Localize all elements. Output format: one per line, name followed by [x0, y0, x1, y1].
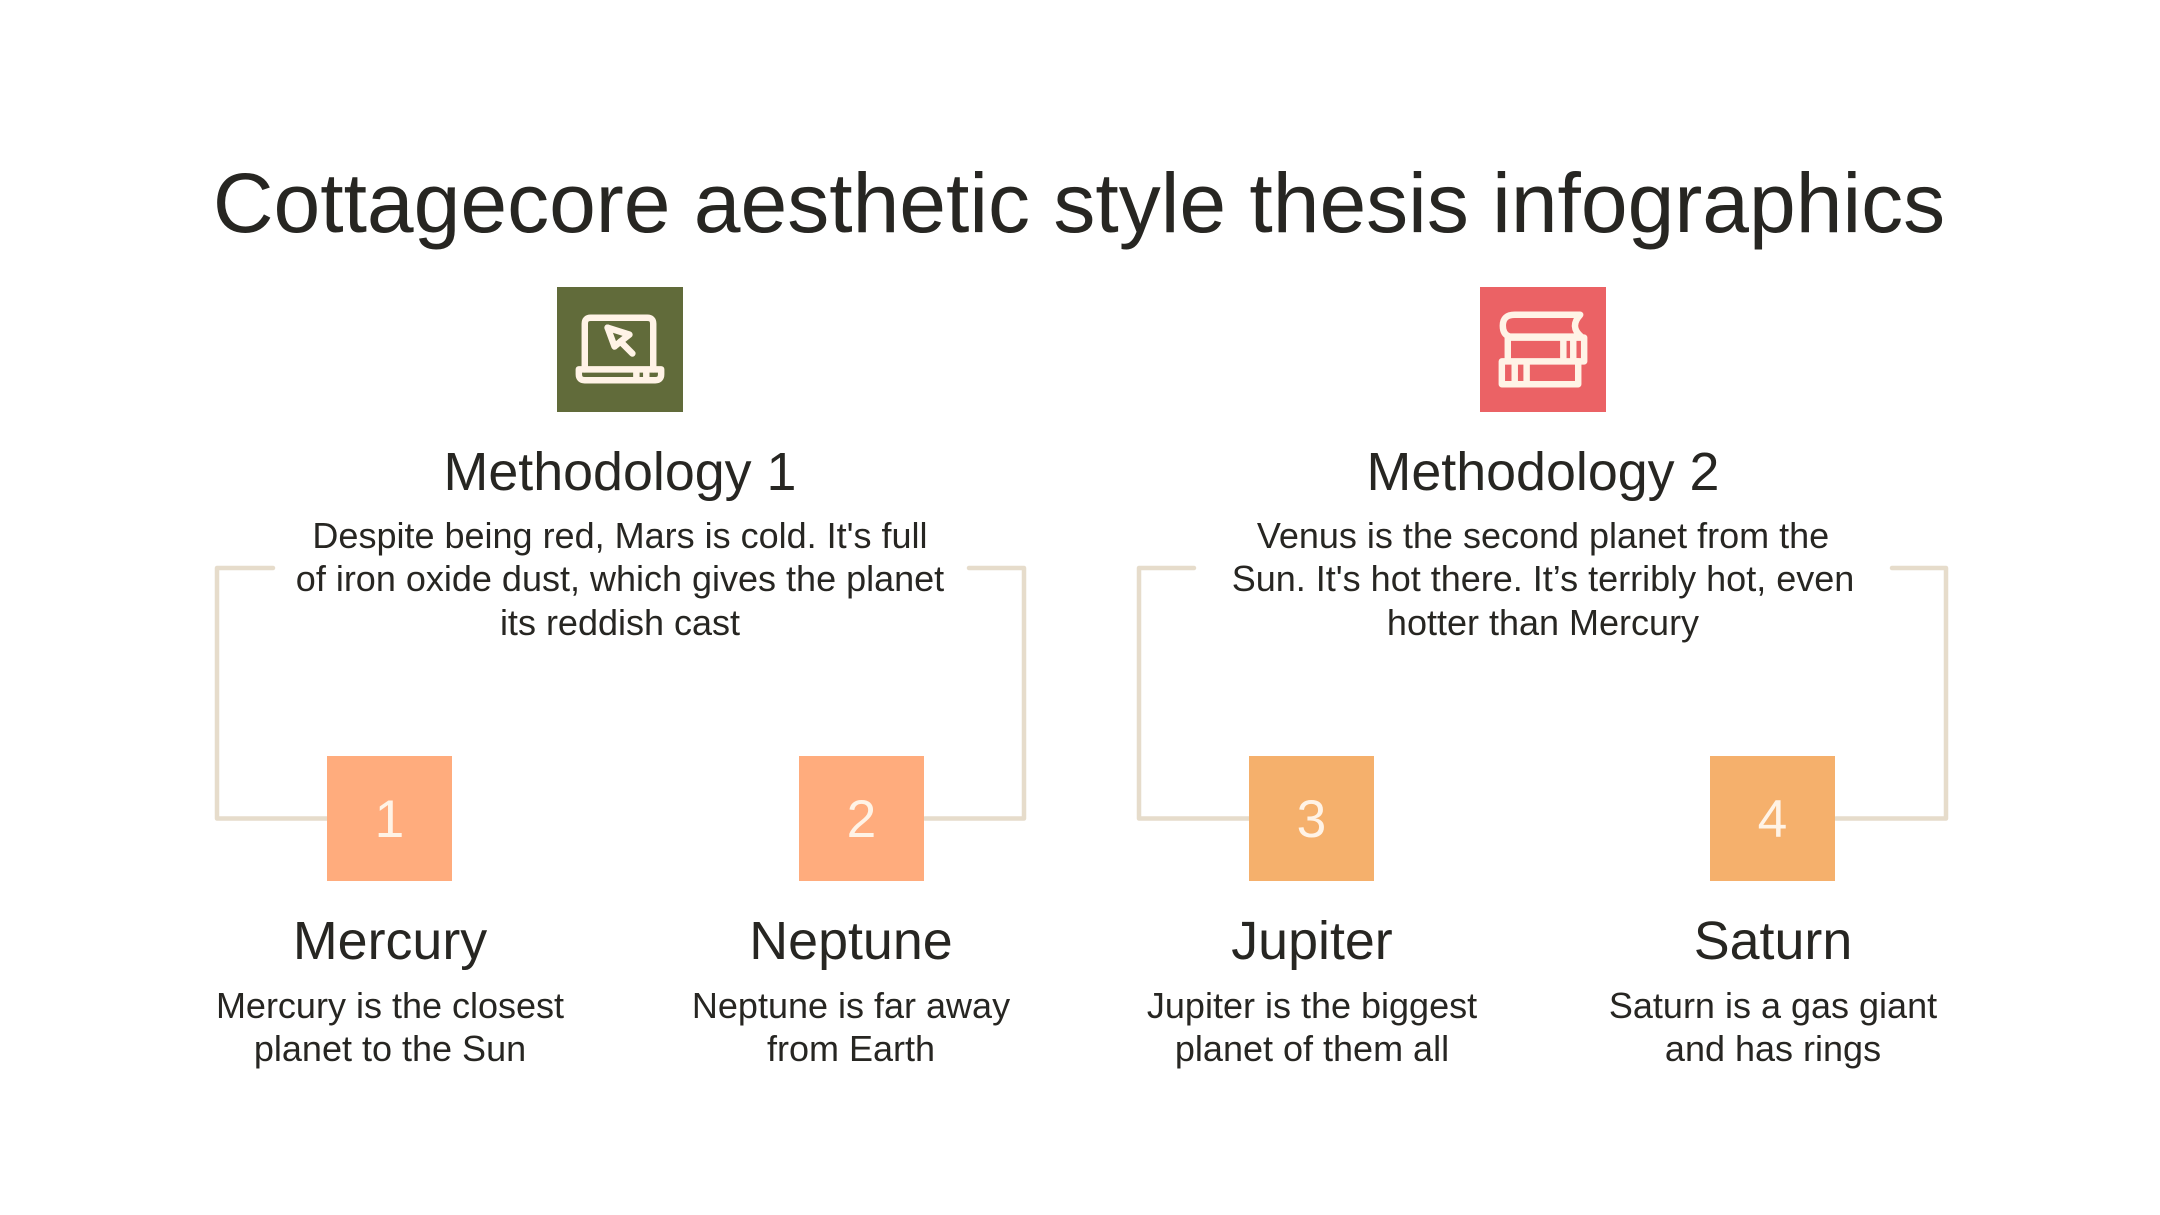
text: saturn description: and has rings [1665, 1028, 1881, 1069]
text: mercury description [216, 984, 564, 1069]
bracket: methodology 1 connector [214, 566, 1026, 821]
text: methodology 1 description: its reddish cast [500, 602, 740, 643]
bracket: methodology 2 connector [1136, 566, 1948, 821]
text: saturn description: Saturn is a gas giant [1609, 984, 1937, 1026]
number box 2 [799, 756, 924, 881]
number box 4: 4 [1758, 790, 1787, 849]
heading: jupiter: Jupiter [1231, 910, 1393, 970]
text: methodology 2 description: Sun. It's hot there. It’s terribly hot, even [1232, 558, 1854, 599]
text: methodology 1 description: Despite being red, Mars is cold. It's full [312, 515, 928, 556]
number box 4 [1710, 756, 1835, 881]
heading: methodology 2: Methodology 2 [1367, 442, 1719, 502]
heading: methodology 1: Methodology 1 [444, 442, 796, 502]
text: methodology 1 description: of iron oxide dust, which gives the planet [296, 558, 944, 599]
number box 1: 1 [375, 790, 404, 849]
heading: neptune: Neptune [749, 910, 953, 970]
icon: stack of books [1480, 287, 1606, 412]
text: mercury description: planet to the Sun [254, 1028, 526, 1069]
text: neptune description [692, 984, 1010, 1069]
number box 2: 2 [847, 790, 876, 849]
text: methodology 2 description: Venus is the second planet from the [1257, 515, 1829, 556]
number box 3: 3 [1297, 790, 1326, 849]
text: neptune description: Neptune is far away [692, 984, 1010, 1026]
text: methodology 1 description [296, 515, 944, 643]
text: saturn description [1609, 984, 1937, 1069]
number box 3 [1249, 756, 1374, 881]
text: jupiter description [1147, 984, 1477, 1069]
number box 1 [327, 756, 452, 881]
heading: saturn: Saturn [1694, 910, 1852, 970]
icon: laptop with cursor [557, 287, 682, 412]
text: methodology 2 description: hotter than Mercury [1387, 602, 1699, 643]
heading: mercury: Mercury [293, 910, 487, 970]
text: jupiter description: Jupiter is the biggest [1147, 984, 1477, 1026]
text: jupiter description: planet of them all [1175, 1028, 1449, 1069]
title: Cottagecore aesthetic style thesis infographics [213, 156, 1945, 250]
text: neptune description: from Earth [767, 1028, 935, 1069]
text: mercury description: Mercury is the closest [216, 984, 564, 1026]
text: methodology 2 description [1232, 515, 1854, 643]
